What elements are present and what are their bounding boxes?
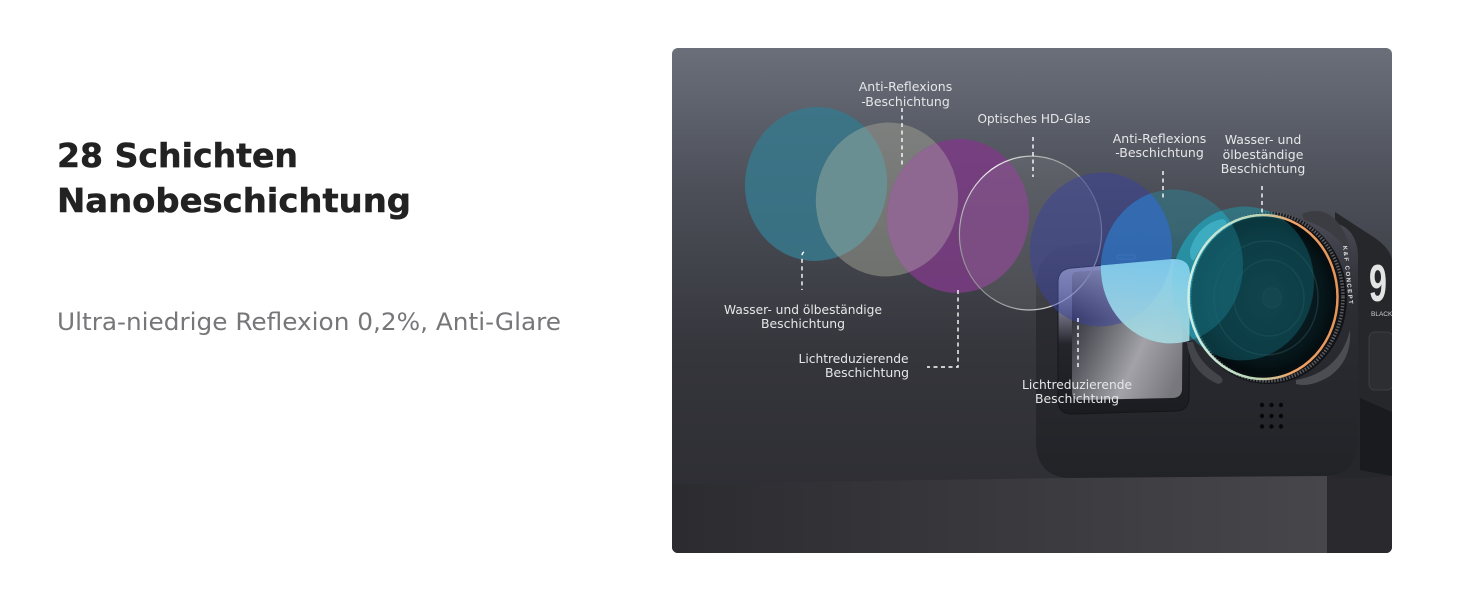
layer: blue coating <box>1030 172 1172 326</box>
label: water and oil left <box>724 304 882 330</box>
leader lines <box>802 108 1262 368</box>
layer: teal coating six <box>1101 190 1243 344</box>
layer: water and oil resistant coating <box>745 107 864 261</box>
title: 28 Schichten <box>57 136 298 175</box>
label: light reducing right: Lichtreduzierende <box>1022 377 1132 392</box>
label: light reducing left <box>800 354 908 380</box>
panel: lens layer diagram <box>672 48 1393 553</box>
lens inner rings <box>1214 241 1318 355</box>
subtitle: Ultra-niedrige Reflexion 0,2%, Anti-Glare <box>57 308 561 336</box>
lens mount clips <box>1187 211 1352 385</box>
label: anti-reflection top: Anti-Reflexions <box>859 79 952 94</box>
lens shade <box>1191 217 1319 365</box>
overlap: grey and purple <box>887 144 958 272</box>
label: water and oil left: Wasser- und ölbeständige <box>724 302 882 317</box>
layer: light reducing coating <box>887 139 1029 293</box>
front screen <box>1058 259 1190 414</box>
overlap: teal and grey <box>816 127 887 256</box>
camera front body <box>1036 222 1358 478</box>
screen glow through coatings <box>1100 259 1190 344</box>
label: optical glass: Optisches HD-Glas <box>978 111 1090 126</box>
brand text: K&F CONCEPT <box>1341 246 1353 306</box>
label: anti-reflection right: Anti-Reflexions <box>1113 131 1206 146</box>
label: water and oil left: Beschichtung <box>761 316 845 331</box>
panel background <box>672 48 1392 553</box>
side door <box>1360 398 1392 476</box>
filter ring highlight <box>1188 215 1338 379</box>
platform <box>672 474 1392 553</box>
label: water and oil right: Beschichtung <box>1221 161 1305 176</box>
filter body <box>1210 220 1336 378</box>
lens glass <box>1192 254 1324 362</box>
title: Nanobeschichtung <box>57 181 411 220</box>
overlap: blue and teal <box>1101 194 1172 322</box>
power button <box>1369 332 1393 390</box>
label: light reducing right: Beschichtung <box>1035 391 1119 406</box>
label: light reducing left: Lichtreduzierende <box>798 351 909 366</box>
layer: teal coating seven <box>1176 206 1314 360</box>
camera side <box>1335 212 1392 478</box>
knurled ring <box>1191 213 1343 381</box>
label: light reducing right <box>1022 377 1132 406</box>
model mark: 9 <box>1369 255 1387 313</box>
title <box>57 136 411 220</box>
model mark: BLACK <box>1371 311 1393 318</box>
label: anti-reflection top: -Beschichtung <box>861 94 950 109</box>
speaker grille <box>1260 403 1283 429</box>
lens mount base <box>1212 212 1347 384</box>
label: anti-reflection right: -Beschichtung <box>1115 145 1204 160</box>
status light <box>1117 255 1135 259</box>
layer: anti-reflection coating <box>816 122 936 276</box>
label: water and oil right: Wasser- und <box>1225 132 1301 147</box>
model mark <box>1370 264 1392 316</box>
overlap: six and seven <box>1176 210 1243 340</box>
label: water and oil right: ölbeständige <box>1223 147 1304 162</box>
camera <box>1036 211 1393 478</box>
layer: optical HD glass <box>958 156 1102 311</box>
label: light reducing left: Beschichtung <box>825 365 909 380</box>
